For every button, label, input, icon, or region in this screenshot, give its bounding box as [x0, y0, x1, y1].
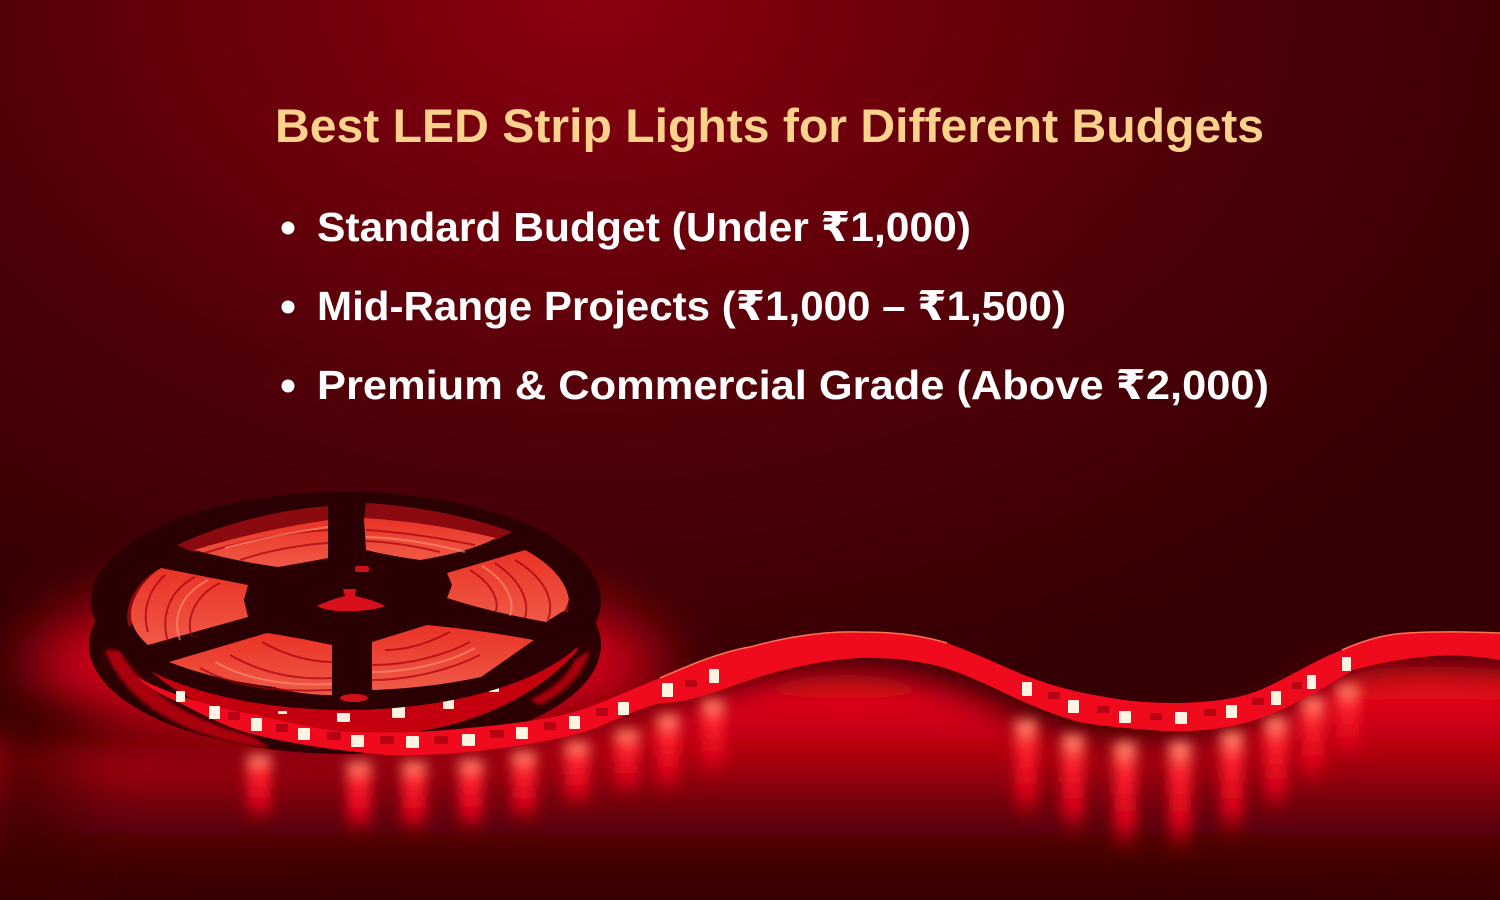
coil LEDs — [278, 684, 499, 722]
item: standard budget: Standard Budget (Under ₹1,000) — [317, 204, 971, 250]
rear flange reflections — [105, 650, 270, 748]
LED strip — [137, 632, 1500, 755]
lower plate slot — [340, 694, 368, 702]
title: Best LED Strip Lights for Different Budgets — [275, 99, 1264, 152]
LED reel — [89, 492, 601, 754]
rear flange — [89, 536, 601, 754]
plate windows with lit coil — [131, 518, 569, 695]
item: mid-range projects: Mid-Range Projects (₹1,000 – ₹1,500) — [317, 283, 1066, 329]
floor glow from LED strip — [0, 580, 1500, 900]
coil highlights — [177, 527, 512, 684]
strip component marks — [228, 680, 1302, 744]
hub hole — [317, 589, 385, 611]
light reflections below strip — [247, 685, 1359, 857]
strip highlight edge — [660, 632, 1500, 678]
plate window rims — [127, 503, 569, 627]
strip body — [137, 632, 1500, 755]
coil winding lines — [146, 530, 550, 691]
coil side of strip — [140, 600, 578, 735]
budget list — [282, 204, 1269, 408]
item: premium and commercial grade: Premium & Commercial Grade (Above ₹2,000) — [317, 362, 1269, 408]
strip LEDs — [176, 657, 1351, 748]
front plate — [91, 492, 601, 710]
hub slot — [355, 566, 369, 572]
